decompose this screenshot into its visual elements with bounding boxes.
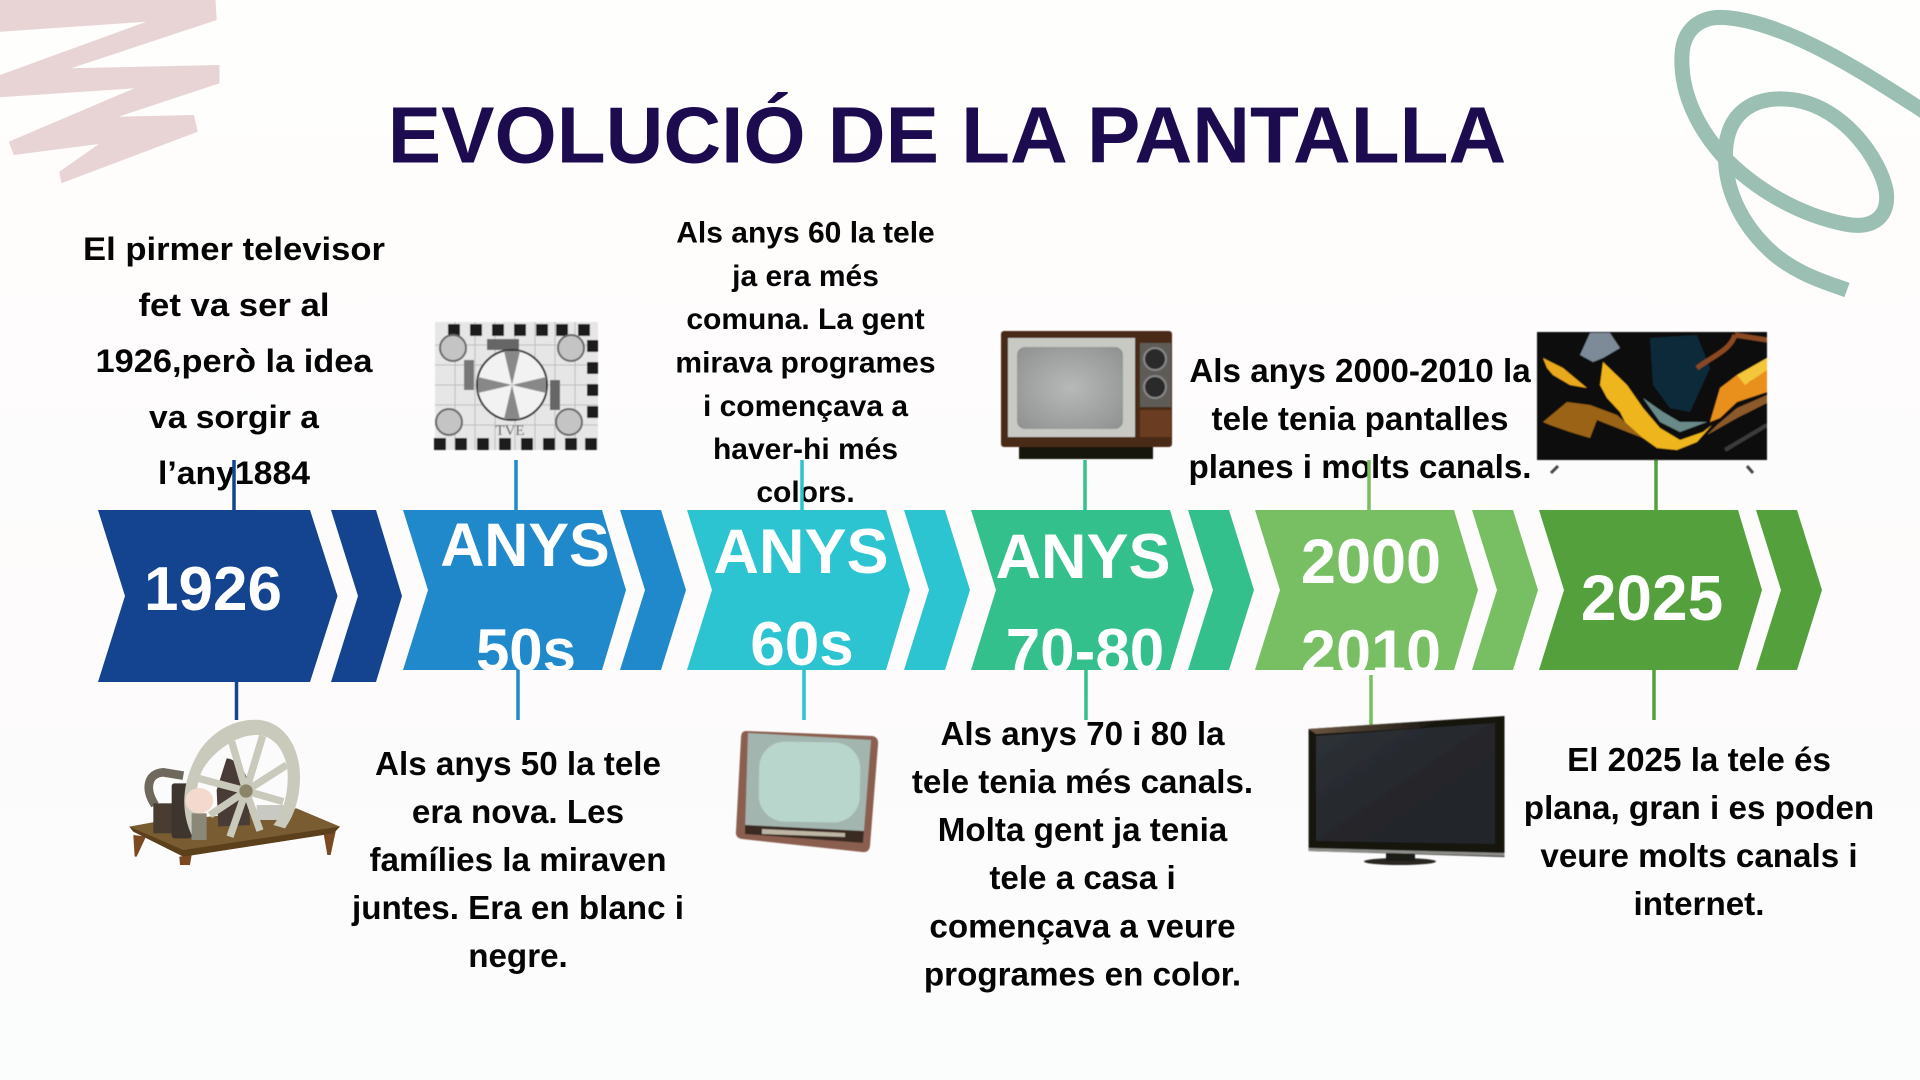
text block: anys 60 [675,216,936,509]
text block: anys 2000-2010: tele tenia pantalles [1212,401,1508,438]
text block: anys 60: haver-hi més [713,433,898,466]
chevron: anys 50s [403,510,686,684]
chevron: 2025 [1539,510,1822,670]
text block: anys 50: negre. [468,938,568,975]
text block: anys 50: era nova. Les [412,794,624,831]
text block: 2025: El 2025 la tele és [1567,742,1831,779]
chevron: anys 70-80: 70-80 [1006,617,1164,686]
icon: test card image: TVE [495,423,525,439]
chevron timeline [98,510,1822,688]
text block: anys 60: i començava a [703,390,908,423]
chevron: anys 60s: 60s [750,610,854,679]
text block: anys 60: ja era més [731,260,879,293]
text block: 2025: veure molts canals i [1540,838,1858,875]
chevron: anys 60s [687,510,970,679]
text block: anys 60: Als anys 60 la tele [676,216,935,250]
icon: modern television with abstract art [1537,332,1767,473]
text block: anys 2000-2010: planes i molts canals. [1188,449,1532,486]
text block: anys 60: colors. [756,476,855,509]
icon: test card image [434,322,598,450]
text block: anys 70-80 [912,716,1253,994]
chevron: 1926 [98,510,402,682]
text block: anys 70-80: tele a casa i [989,860,1176,897]
text block: 2025 [1524,742,1874,923]
icon: 1960s television [736,731,878,852]
text block: anys 70-80: començava a veure [929,908,1236,946]
chevron: 2000-2010: 2000 [1301,527,1441,597]
chevron: 1926: 1926 [144,555,282,624]
text block: anys 50: famílies la miraven [369,842,667,879]
text block: anys 2000-2010 [1188,353,1532,486]
text block: anys 70-80: Molta gent ja tenia [938,812,1228,849]
decorative pink scribble [0,0,220,183]
connector lines [234,460,1656,725]
text block: 2025: plana, gran i es poden [1524,790,1874,827]
icon: flat plasma television [1309,716,1504,865]
icon: Nipkow disc apparatus [129,720,340,865]
text block: anys 70-80: programes en color. [924,956,1241,994]
chevron: anys 50s: 50s [476,617,576,684]
chevron: anys 70-80 [971,510,1254,686]
chevron: 2025: 2025 [1581,562,1723,634]
text block: 2025: internet. [1634,886,1764,923]
text block: anys 70-80: Als anys 70 i 80 la [940,716,1225,753]
text block: anys 50 [351,746,684,975]
text block: anys 50: juntes. Era en blanc i [351,890,684,927]
chevron: anys 60s: ANYS [713,517,889,587]
text block: anys 60: comuna. La gent [686,303,925,336]
text block: anys 50: Als anys 50 la tele [375,746,661,783]
text block: 1926: l’any1884 [158,455,310,491]
icon: wood cabinet television [1001,331,1172,459]
chevron: anys 70-80: ANYS [995,522,1171,592]
text block: 1926 [83,231,385,491]
decorative green scribble [1682,17,1920,290]
chevron: anys 50s: ANYS [440,511,610,579]
chevron: 2000-2010 [1255,510,1538,670]
text block: anys 2000-2010: Als anys 2000-2010 la [1189,353,1531,390]
text block: anys 60: mirava programes [675,346,936,380]
text block: anys 70-80: tele tenia més canals. [912,764,1253,801]
text block: 1926: 1926,però la idea [96,343,373,379]
text block: 1926: El pirmer televisor [83,231,385,267]
text block: 1926: fet va ser al [138,287,330,323]
chevron: 2000-2010: 2010 [1301,618,1441,688]
text block: 1926: va sorgir a [149,399,319,435]
title: EVOLUCIÓ DE LA PANTALLA [388,90,1506,180]
